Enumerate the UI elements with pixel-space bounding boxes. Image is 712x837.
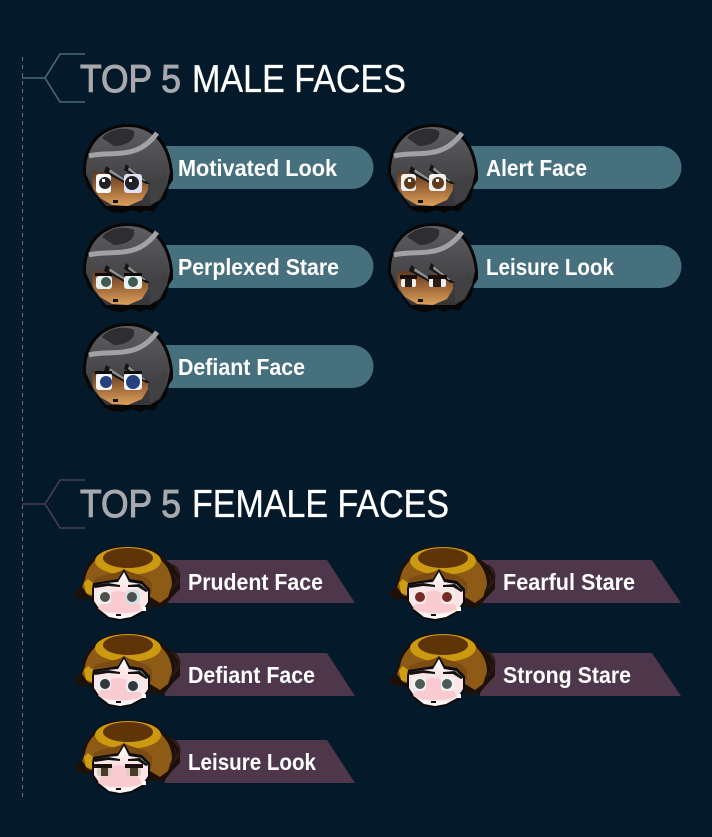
section: top 5 female faces [22, 480, 681, 795]
vertical dashed guide line [22, 57, 24, 798]
item: Strong Stare [389, 633, 681, 708]
item: Fearful Stare [389, 546, 681, 621]
item: Fearful Stare: Fearful Stare [503, 569, 635, 595]
item: Perplexed Stare [83, 223, 374, 312]
connector bracket: female heading [22, 480, 85, 528]
item: Motivated Look [83, 124, 374, 213]
item: Alert Face [388, 124, 682, 213]
heading: top 5 male faces: MALE FACES [192, 58, 406, 101]
item: Motivated Look: Motivated Look [178, 155, 337, 181]
item: Leisure Look: Leisure Look [486, 254, 614, 280]
item: Prudent Face: Prudent Face [188, 569, 323, 595]
connector bracket: male heading [22, 54, 85, 102]
item: Defiant Face: Defiant Face [178, 354, 305, 380]
item: Defiant Face [83, 323, 374, 412]
heading: top 5 female faces: TOP 5 [80, 483, 181, 526]
item: Leisure Look [388, 223, 682, 312]
item: Perplexed Stare: Perplexed Stare [178, 254, 339, 280]
section: top 5 male faces [22, 54, 682, 412]
heading: top 5 female faces: FEMALE FACES [192, 483, 449, 526]
heading: top 5 male faces: TOP 5 [80, 58, 181, 101]
item: Alert Face: Alert Face [486, 155, 587, 181]
item: Leisure Look [74, 720, 355, 795]
item: Strong Stare: Strong Stare [503, 662, 631, 688]
heading: top 5 male faces [80, 58, 406, 101]
item: Leisure Look: Leisure Look [188, 749, 316, 775]
item: Defiant Face [74, 633, 355, 708]
item: Prudent Face [74, 546, 355, 621]
item: Defiant Face: Defiant Face [188, 662, 315, 688]
heading: top 5 female faces [80, 483, 449, 526]
